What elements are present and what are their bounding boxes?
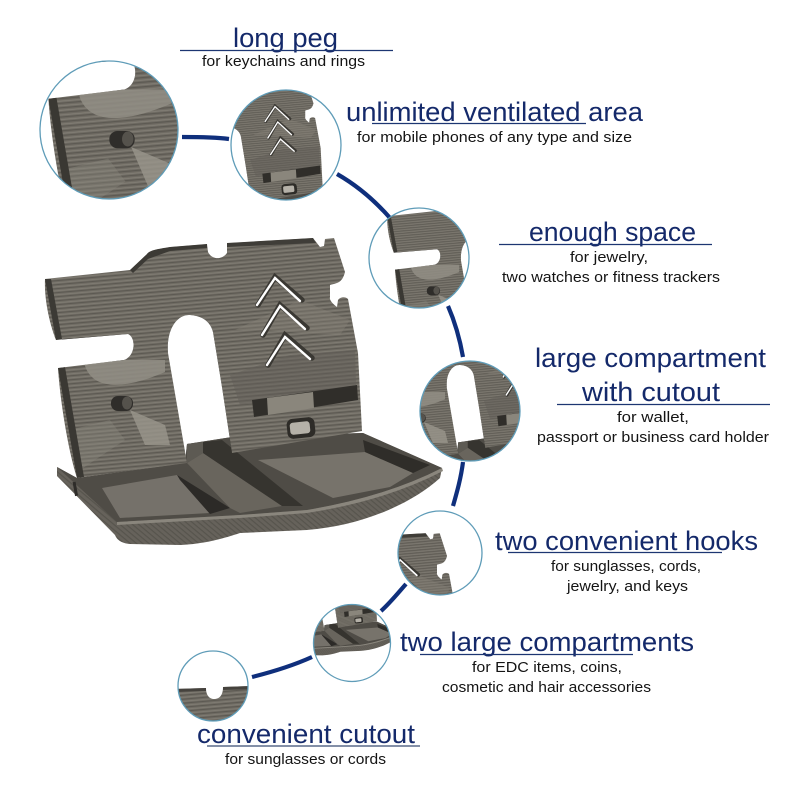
label: convenient cutout xyxy=(197,719,420,768)
label: unlimited ventilated area xyxy=(346,97,644,146)
circle: long peg detail xyxy=(39,60,179,200)
label: two convenient hooks: for sunglasses, cords, xyxy=(551,558,701,575)
label: large compartment with cutout: passport or business card holder xyxy=(537,429,769,446)
peg xyxy=(111,396,133,411)
circle: top cutout detail xyxy=(176,651,250,722)
dark panel edges xyxy=(45,279,62,340)
label: two large compartments: for EDC items, coins, xyxy=(472,659,622,676)
label: convenient cutout: for sunglasses or cords xyxy=(225,751,386,768)
label: two convenient hooks xyxy=(495,526,758,595)
label: long peg: long peg xyxy=(233,23,338,53)
label: large compartment with cutout xyxy=(535,343,770,446)
circle: hooks detail xyxy=(397,510,483,596)
connector arcs xyxy=(182,137,463,677)
label: two large compartments: cosmetic and hair accessories xyxy=(442,679,651,696)
label: enough space: for jewelry, xyxy=(570,249,648,266)
label: unlimited ventilated area: for mobile phones of any type and size xyxy=(357,129,632,146)
icon: chevron vents xyxy=(257,277,312,365)
label: large compartment with cutout: large compartment xyxy=(535,343,766,373)
main product: wooden docking station xyxy=(30,220,443,545)
label: two convenient hooks: jewelry, and keys xyxy=(566,578,688,595)
circle: compartments detail xyxy=(312,604,392,682)
label: enough space xyxy=(499,217,720,286)
label: long peg xyxy=(180,23,393,70)
circle: watch space detail xyxy=(368,207,470,309)
label: unlimited ventilated area: unlimited ventilated area xyxy=(346,97,644,127)
label: enough space: two watches or fitness trackers xyxy=(502,269,720,286)
label: large compartment with cutout: with cutout xyxy=(581,377,721,407)
label: long peg: for keychains and rings xyxy=(202,53,365,70)
label: two large compartments xyxy=(400,627,694,696)
phone holder slot xyxy=(252,385,358,439)
label: two large compartments: two large compartments xyxy=(400,627,694,657)
label: enough space: enough space xyxy=(529,217,696,247)
circle: cutout compartment detail xyxy=(419,360,521,462)
label: convenient cutout: convenient cutout xyxy=(197,719,416,749)
tray base xyxy=(57,433,443,545)
label: large compartment with cutout: for wallet, xyxy=(617,409,689,426)
circle: ventilated area detail xyxy=(230,89,342,201)
label: two convenient hooks: two convenient hooks xyxy=(495,526,758,556)
back panel xyxy=(30,220,370,490)
